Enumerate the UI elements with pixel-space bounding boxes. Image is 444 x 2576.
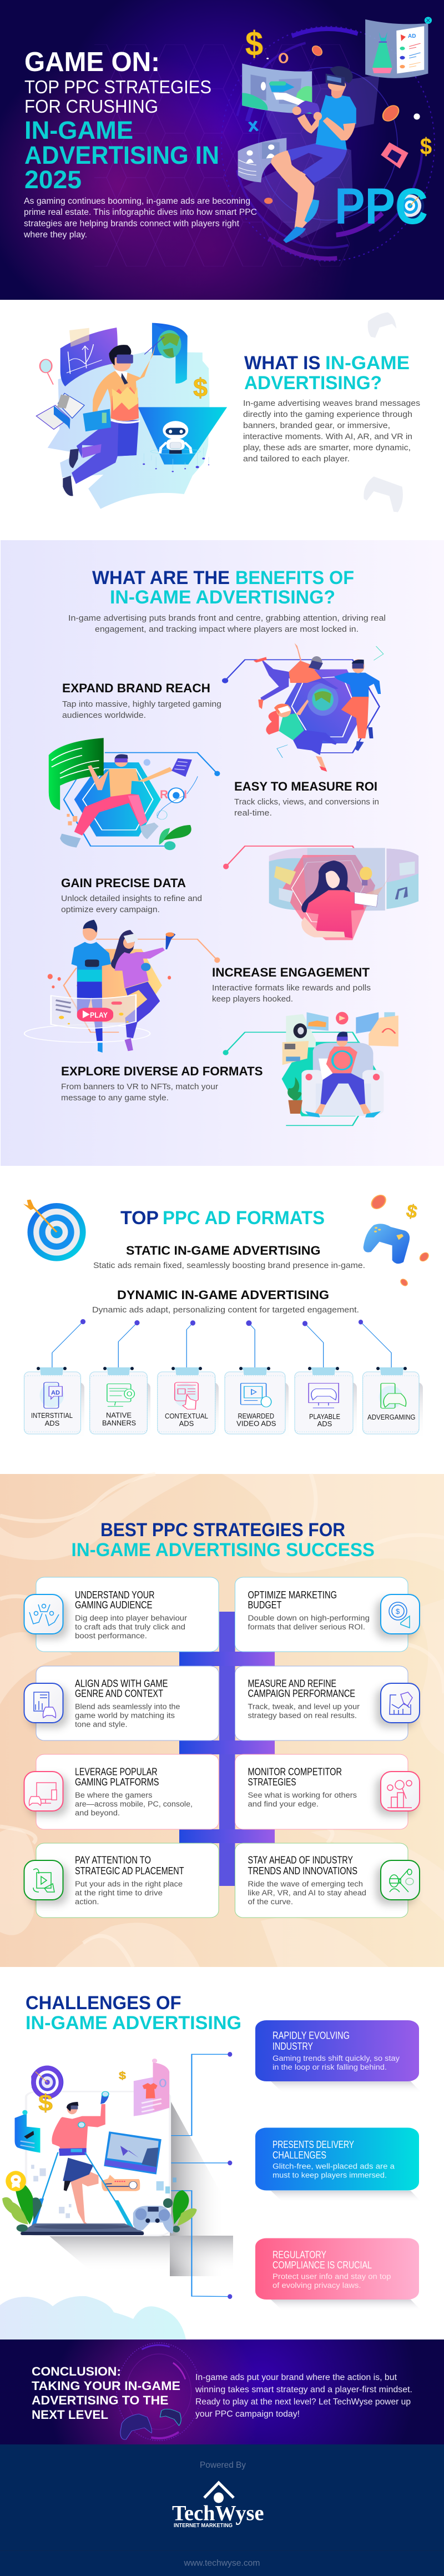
- cloud decoration: [0, 2296, 186, 2339]
- dollar signs: $: [245, 25, 263, 63]
- open book: [36, 393, 84, 429]
- hero title: TOP PPC STRATEGIES: [24, 77, 211, 97]
- heading: WHAT IS: [244, 353, 321, 374]
- expand brand reach text: Tap into massive, highly targeted gaming: [62, 700, 221, 709]
- strategy card: align ads: game world by matching its: [75, 1711, 175, 1720]
- strategy card: understand audience: boost performance.: [75, 1632, 147, 1640]
- icon: blue game controller with coins: [364, 1194, 430, 1286]
- description: and tailored to each player.: [243, 454, 350, 464]
- strategy card: monitor competitors: STRATEGIES: [248, 1777, 296, 1788]
- green flag: [49, 738, 104, 810]
- strategy card: stay ahead: [235, 1843, 420, 1918]
- strategy card: understand audience: Dig deep into player behaviour: [75, 1614, 188, 1622]
- illustration: expand brand reach: [222, 643, 384, 772]
- curved background panels: [269, 848, 307, 870]
- coins and decorative tokens: [249, 45, 420, 204]
- heading: IN-GAME ADVERTISING: [26, 2012, 241, 2034]
- strategy card: leverage platforms: Be where the gamers: [75, 1791, 153, 1799]
- icon badge: people: [24, 1594, 63, 1634]
- player figure: [271, 66, 356, 243]
- challenge card: delivery challenges: CHALLENGES: [273, 2150, 326, 2161]
- heading: TOP: [120, 1208, 159, 1229]
- target and arrow: [168, 788, 184, 803]
- challenge card: regulatory compliance: of evolving privacy laws.: [273, 2281, 361, 2290]
- explore diverse ad formats text: From banners to VR to NFTs, match your: [61, 1082, 218, 1091]
- card labels: REWARDED: [238, 1412, 274, 1420]
- strategy card: strategic placement: Put your ads in the right place: [75, 1880, 183, 1888]
- review bubble: [102, 2175, 140, 2191]
- hero intro text: [23, 197, 257, 240]
- hero title: [24, 47, 219, 194]
- strategy card: monitor competitors: [235, 1754, 420, 1829]
- dollar signs: $: [38, 2090, 53, 2116]
- strategy card: stay ahead: like AR, VR, and AI to stay ahead: [248, 1889, 366, 1897]
- game screen panel: [242, 63, 312, 114]
- strategy card: understand audience: to craft ads that truly click and: [75, 1623, 185, 1631]
- gain precise data text: Unlock detailed insights to refine and: [61, 894, 202, 903]
- expand brand reach text: audiences worldwide.: [62, 711, 146, 720]
- challenge card: regulatory compliance: REGULATORY: [273, 2250, 326, 2261]
- increase engagement text: keep players hooked.: [212, 994, 293, 1004]
- conclusion text: [195, 2373, 412, 2419]
- strategy card: leverage platforms: LEVERAGE POPULAR: [75, 1767, 158, 1778]
- strategy card: monitor competitors: MONITOR COMPETITOR: [248, 1767, 342, 1778]
- challenge card: regulatory compliance: Protect user info and stay on top: [273, 2272, 391, 2281]
- increase engagement text: [212, 965, 371, 1004]
- challenge card: rapidly evolving: in the loop or risk falling behind.: [273, 2063, 387, 2071]
- icon: target with arrow: [23, 1200, 86, 1261]
- hero title: 2025: [24, 165, 82, 194]
- heading: [26, 1993, 241, 2034]
- heading: [92, 567, 354, 608]
- card labels: [31, 1411, 415, 1428]
- mini cards: [274, 862, 415, 905]
- strategy card: measure and refine: Track, tweak, and level up your: [248, 1702, 360, 1711]
- illustration: gain precise data: [223, 846, 418, 940]
- static advertising block: STATIC IN-GAME ADVERTISING: [126, 1244, 321, 1257]
- expand brand reach text: [62, 681, 221, 720]
- shop panel: shoe: [15, 2110, 40, 2153]
- card labels: VIDEO ADS: [236, 1419, 276, 1428]
- pale background blob: [48, 351, 210, 509]
- hero intro text: As gaming continues booming, in-game ads are becoming: [24, 197, 250, 206]
- strategy card: stay ahead: STAY AHEAD OF INDUSTRY: [248, 1854, 353, 1865]
- target badge: [31, 2066, 63, 2099]
- explore diverse ad formats text: EXPLORE DIVERSE AD FORMATS: [61, 1064, 263, 1078]
- hero intro text: prime real estate. This infographic dives into how smart PPC: [24, 208, 257, 217]
- footer background: [0, 2444, 444, 2576]
- pixels: [67, 814, 77, 826]
- card labels: INTERSTITIAL: [31, 1411, 73, 1420]
- ad format card: rewarded video: [225, 1367, 289, 1442]
- notebook: [83, 409, 111, 431]
- dollar signs: $: [420, 133, 432, 159]
- strategy card: leverage platforms: are—across mobile, PC, console,: [75, 1800, 193, 1808]
- strategy card: leverage platforms: GAMING PLATFORMS: [75, 1777, 159, 1788]
- floating cards: [282, 1012, 398, 1065]
- illustration: VR teacher and robot: [36, 323, 227, 509]
- icon badge: report and controller: [24, 1683, 63, 1723]
- icon badge: video and megaphone: [24, 1860, 63, 1900]
- connector lines: [52, 1319, 391, 1368]
- strategy card: leverage platforms: [24, 1754, 219, 1829]
- ROI label: [160, 788, 187, 801]
- gamepad: [133, 2206, 173, 2233]
- ROI label: I: [184, 788, 187, 801]
- conclusion title: [32, 2364, 180, 2422]
- card labels: NATIVE: [106, 1411, 132, 1419]
- section: top PPC ad formats: [23, 1194, 430, 1442]
- strategy card: align ads: tone and style.: [75, 1720, 128, 1729]
- challenge card: rapidly evolving: RAPIDLY EVOLVING: [273, 2030, 350, 2041]
- conclusion text: In-game ads put your brand where the action is, but: [195, 2373, 397, 2382]
- heading: CHALLENGES OF: [26, 1993, 181, 2014]
- white background: [0, 300, 444, 540]
- award badge: [6, 2171, 26, 2191]
- strategy card: understand audience: GAMING AUDIENCE: [75, 1599, 152, 1611]
- card labels: PLAYABLE: [309, 1412, 340, 1421]
- section: benefits: [1, 540, 444, 1166]
- ad panel with dress: [365, 17, 432, 78]
- strategy card: monitor competitors: See what is working for others: [248, 1791, 357, 1799]
- challenge card: rapidly evolving: INDUSTRY: [273, 2041, 313, 2052]
- potted plant: [287, 1077, 302, 1114]
- player figure: [52, 2091, 109, 2229]
- ad format card: contextual: [158, 1367, 219, 1442]
- strategy card: measure and refine: [235, 1666, 420, 1740]
- strategy card: optimize budget: BUDGET: [248, 1599, 282, 1611]
- strategy card: measure and refine: CAMPAIGN PERFORMANCE: [248, 1688, 355, 1699]
- translucent stage panel: [244, 74, 380, 238]
- man: [72, 920, 111, 1053]
- AD icon text: AD: [51, 1390, 60, 1396]
- pixels: [31, 2165, 176, 2218]
- PPC target: [396, 192, 424, 220]
- dollar sign: $: [193, 373, 208, 402]
- plants: [2, 2182, 197, 2232]
- globe panel: [152, 323, 188, 384]
- gain precise data text: optimize every campaign.: [61, 905, 160, 914]
- hero rings: [194, 0, 444, 291]
- card labels: ADVERGAMING: [367, 1413, 415, 1421]
- logo: TechWyse: TechWyse: [172, 2502, 264, 2525]
- strategy card: align ads: ALIGN ADS WITH GAME: [75, 1678, 168, 1689]
- icon badge: competitor chart: [381, 1772, 420, 1811]
- right standing figure: [334, 659, 381, 751]
- description: interactive moments. With AI, AR, and VR in: [243, 432, 412, 441]
- hero intro text: strategies are helping brands connect with players right: [24, 219, 240, 229]
- icon: monitor with controller: [309, 1383, 339, 1408]
- heading: BEST PPC STRATEGIES FOR: [100, 1520, 345, 1541]
- heading: [71, 1520, 375, 1561]
- hero illustration: VR player: [238, 17, 432, 243]
- hologram funnel: [138, 407, 227, 465]
- flying document: [171, 758, 192, 777]
- hero title: ADVERTISING IN: [24, 141, 219, 169]
- powered by: Powered By: [200, 2461, 246, 2470]
- heading: ADVERTISING?: [244, 373, 382, 394]
- ad format card: playable: [295, 1367, 357, 1442]
- strategy card: understand audience: UNDERSTAND YOUR: [75, 1589, 154, 1601]
- card labels: CONTEXTUAL: [165, 1412, 208, 1420]
- dynamic advertising block: Dynamic ads adapt, personalizing content for targeted engagement.: [92, 1305, 359, 1315]
- icon: phone with controller: [379, 1383, 406, 1408]
- increase engagement text: Interactive formats like rewards and polls: [212, 983, 371, 993]
- icon: monitor with target: [107, 1384, 134, 1406]
- strategy card: measure and refine: strategy based on real results.: [248, 1711, 357, 1720]
- intro: [68, 613, 386, 634]
- controllers: [120, 2409, 181, 2439]
- heading: [244, 353, 410, 394]
- strategy card: strategic placement: PAY ATTENTION TO: [75, 1854, 151, 1865]
- hero title: GAME ON:: [24, 47, 160, 77]
- ad format card: interstitial: [24, 1367, 84, 1442]
- icon badge: devices: [24, 1772, 63, 1811]
- section: hero: [0, 0, 444, 300]
- website: www.techwyse.com: [184, 2558, 260, 2568]
- conclusion title: ADVERTISING TO THE: [32, 2393, 169, 2407]
- glass play panel: [51, 995, 136, 1028]
- conclusion text: winning takes smart strategy and a player-first mindset.: [195, 2385, 412, 2394]
- central connector cross: [179, 1612, 275, 1886]
- strategy card: align ads: Blend ads seamlessly into the: [75, 1702, 180, 1711]
- icon: phone with AD bubble: [39, 1382, 64, 1408]
- ad format card: native: [90, 1367, 150, 1442]
- challenge card: delivery challenges: PRESENTS DELIVERY: [273, 2139, 354, 2150]
- logo: TechWyse: INTERNET MARKETING: [174, 2523, 233, 2529]
- challenge card: delivery challenges: [255, 2127, 422, 2202]
- card labels: BANNERS: [102, 1419, 136, 1427]
- lower-left glass panel: [238, 138, 286, 183]
- section: footer: [0, 2444, 444, 2576]
- robot: [143, 421, 209, 472]
- conclusion text: Ready to play at the next level? Let TechWyse power up: [195, 2397, 411, 2407]
- section: best PPC strategies: [0, 1474, 444, 1967]
- icon badge: chart and megaphone: [381, 1683, 420, 1723]
- hero title: IN-GAME: [24, 116, 133, 144]
- description: banners, branded gear, or immersive,: [243, 421, 390, 430]
- easy to measure ROI text: EASY TO MEASURE ROI: [234, 779, 377, 793]
- section: challenges: [0, 1967, 444, 2339]
- challenge card: rapidly evolving: [255, 2020, 422, 2093]
- ad format card: advergaming: [363, 1367, 423, 1442]
- white background: [0, 1967, 444, 2339]
- gain precise data text: GAIN PRECISE DATA: [61, 876, 186, 890]
- section: conclusion: [0, 2328, 444, 2456]
- easy to measure ROI text: Track clicks, views, and conversions in: [234, 797, 379, 807]
- description: directly into the gaming experience through: [243, 410, 412, 419]
- strategy card: optimize budget: OPTIMIZE MARKETING: [248, 1589, 337, 1601]
- strategy card: monitor competitors: and find your edge.: [248, 1800, 319, 1808]
- resistance bands and tread base: [21, 2152, 144, 2235]
- strategy card: optimize budget: Double down on high-performing: [248, 1614, 370, 1622]
- coins: [48, 974, 171, 988]
- icon: video with badge: [241, 1383, 271, 1407]
- strategy card: strategic placement: STRATEGIC AD PLACEMENT: [75, 1865, 184, 1876]
- strategy card: optimize budget: formats that deliver serious ROI.: [248, 1623, 365, 1631]
- heading: IN-GAME: [325, 353, 410, 374]
- leaf plant: [159, 828, 170, 845]
- play button label: PLAY: [90, 1010, 108, 1019]
- card icons: [39, 1382, 406, 1409]
- lower-left figure: [266, 700, 337, 772]
- intro: In-game advertising puts brands front and centre, grabbing attention, driving real: [68, 613, 386, 623]
- explore diverse ad formats text: [61, 1064, 263, 1103]
- logo: TechWyse: [172, 2483, 264, 2529]
- chalk board: [60, 328, 118, 386]
- easy to measure ROI text: real-time.: [234, 808, 272, 818]
- strategy card: strategic placement: [24, 1843, 219, 1918]
- armchair: [301, 1043, 384, 1116]
- static advertising block: Static ads remain fixed, seamlessly boosting brand presence in-game.: [93, 1261, 365, 1270]
- illustration: VR fitness player: [2, 2059, 197, 2236]
- heading: PPC AD FORMATS: [163, 1208, 325, 1229]
- teacher figure: [63, 337, 164, 496]
- card labels: ADS: [45, 1419, 60, 1427]
- conclusion text: your PPC campaign today!: [195, 2409, 300, 2419]
- controller watermarks: [364, 313, 403, 512]
- jumping figure: [60, 754, 173, 848]
- connector lines: [170, 2052, 232, 2299]
- easy to measure ROI text: [234, 779, 379, 818]
- hero background: [0, 0, 444, 300]
- gain precise data text: [61, 876, 202, 914]
- challenge card: rapidly evolving: Gaming trends shift quickly, so stay: [273, 2054, 400, 2062]
- heading: IN-GAME ADVERTISING SUCCESS: [71, 1539, 375, 1561]
- video game screen: [104, 2131, 162, 2175]
- dollar sign: $: [405, 1200, 419, 1222]
- illustration: explore diverse ad formats: [223, 1012, 398, 1125]
- decor brackets: [374, 646, 384, 660]
- peach marbled background: [0, 1474, 444, 1967]
- dynamic advertising block: [92, 1288, 359, 1315]
- challenge card: delivery challenges: must to keep players immersed.: [273, 2171, 387, 2180]
- icon badge: dollar megaphone: [381, 1594, 420, 1634]
- lavender background: [1, 540, 444, 1166]
- dollar signs: [38, 2070, 127, 2116]
- intro: engagement, and tracking impact where players are most locked in.: [95, 625, 359, 634]
- woman: [111, 930, 175, 1051]
- conclusion title: CONCLUSION:: [32, 2364, 121, 2378]
- icon badge: VR and planet: [381, 1860, 420, 1900]
- pink hexagon: [282, 855, 375, 940]
- section: what is in-game advertising: [0, 300, 444, 540]
- conclusion title: NEXT LEVEL: [32, 2408, 108, 2422]
- illustration: easy to measure ROI: [49, 738, 220, 850]
- heading: IN-GAME ADVERTISING?: [110, 587, 335, 608]
- PPC lettering: PPC: [335, 178, 428, 235]
- woman figure: [301, 861, 392, 938]
- hero intro text: where they play.: [23, 230, 87, 240]
- card labels: ADS: [179, 1419, 194, 1428]
- strategy card: strategic placement: action.: [75, 1898, 99, 1906]
- tablet frame: [26, 2091, 170, 2236]
- conclusion title: TAKING YOUR IN-GAME: [32, 2379, 180, 2393]
- dollar signs: [245, 25, 432, 159]
- strategy card: align ads: [24, 1666, 219, 1740]
- strategy card: leverage platforms: and beyond.: [75, 1809, 120, 1817]
- tablet projected shadow: [49, 2100, 233, 2276]
- strategy card: align ads: GENRE AND CONTEXT: [75, 1688, 163, 1699]
- description: [243, 399, 420, 464]
- heading: WHAT ARE THE: [92, 567, 230, 588]
- magnifier: [40, 359, 53, 385]
- dollar signs: $: [119, 2070, 127, 2082]
- top floating figure: [254, 643, 339, 709]
- strategy card: stay ahead: of the curve.: [248, 1898, 293, 1906]
- explore diverse ad formats text: message to any game style.: [61, 1093, 169, 1103]
- shop panel: shirt: [134, 2059, 169, 2116]
- band background: [0, 2339, 444, 2444]
- icon badge: dollar megaphone: $: [396, 1607, 400, 1616]
- ring decoration: [104, 2328, 214, 2456]
- ad panel label: AD: [408, 33, 416, 39]
- strategy card: stay ahead: TRENDS AND INNOVATIONS: [248, 1865, 357, 1876]
- increase engagement text: INCREASE ENGAGEMENT: [212, 965, 370, 979]
- card labels: ADS: [317, 1420, 332, 1428]
- icon: hand on screen: [174, 1382, 198, 1409]
- hero title: FOR CRUSHING: [24, 96, 158, 117]
- strategy card: optimize budget: [235, 1577, 420, 1652]
- ROI label: R: [160, 788, 168, 801]
- illustration: increase engagement: [24, 920, 220, 1053]
- challenge card: regulatory compliance: COMPLIANCE IS CRUCIAL: [273, 2260, 372, 2271]
- heading: BENEFITS OF: [235, 567, 354, 588]
- expand brand reach text: EXPAND BRAND REACH: [62, 681, 210, 695]
- challenge card: delivery challenges: Glitch-free, well-placed ads are a: [273, 2162, 395, 2171]
- description: play, these ads are smarter, more dynamic,: [243, 443, 411, 452]
- driver figure: [305, 1032, 381, 1118]
- strategy card: stay ahead: Ride the wave of emerging tech: [248, 1880, 363, 1888]
- description: In-game advertising weaves brand messages: [243, 399, 420, 408]
- static advertising block: [93, 1244, 365, 1270]
- challenge card: regulatory compliance: [255, 2238, 422, 2311]
- strategy card: strategic placement: at the right time to drive: [75, 1889, 163, 1897]
- strategy card: measure and refine: MEASURE AND REFINE: [248, 1678, 336, 1689]
- dynamic advertising block: DYNAMIC IN-GAME ADVERTISING: [117, 1288, 329, 1302]
- strategy card: understand audience: [24, 1577, 219, 1652]
